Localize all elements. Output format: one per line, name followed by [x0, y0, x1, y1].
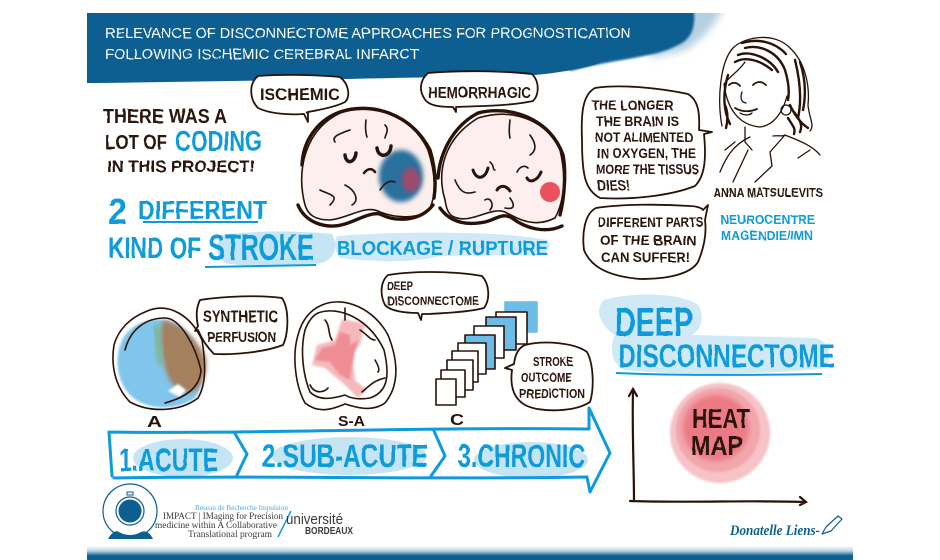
title text: RELEVANCE OF DISCONNECTOME APPROACHES FOR PROGNOSTICATION	[105, 25, 631, 42]
timeline arrow	[109, 408, 610, 492]
affiliation: MAGENDIE/IMN	[721, 228, 813, 243]
heading: 2 different kind of stroke: BLOCKAGE / RUPTURE	[337, 238, 548, 260]
bubble: different parts: OF THE BRAIN	[600, 232, 696, 248]
heading: coding in this project: IN THIS PROJECT!	[107, 157, 255, 176]
label: C: C	[450, 412, 465, 429]
bubble: the longer the brain: THE LONGER	[592, 97, 673, 113]
brain: hemorrhagic	[438, 111, 565, 230]
heading: 2 different kind of stroke: KIND OF	[108, 232, 201, 265]
heading: coding in this project: THERE WAS A	[103, 106, 227, 128]
heading: 2 different kind of stroke: STROKE	[208, 227, 314, 268]
heading: coding in this project: CODING	[175, 126, 262, 158]
heat map text: MAP	[691, 430, 743, 461]
heading: 2 different kind of stroke: DIFFERENT	[138, 195, 267, 225]
highlights	[133, 437, 588, 478]
bubble: the longer the brain: MORE THE TISSUS	[596, 161, 699, 177]
bubble: deep disconnectome: DISCONNECTOME	[387, 294, 479, 308]
footer band	[87, 546, 853, 560]
bubble: deep disconnectome	[382, 272, 488, 320]
brain face	[473, 168, 541, 181]
bubble: hemorrhagic: HEMORRHAGIC	[428, 85, 531, 102]
affiliation	[720, 212, 815, 243]
heat map chart	[629, 383, 806, 505]
bubble: different parts: CAN SUFFER!	[601, 249, 690, 265]
title text	[105, 25, 631, 63]
bubble: the longer the brain: NOT ALIMENTED	[595, 129, 693, 145]
logo text: impact: medicine within A Collaborative	[155, 520, 277, 530]
logo text: impact	[155, 504, 289, 539]
bubble: stroke outcome prediction: PREDICTION	[519, 386, 585, 401]
bubble: synthetic perfusion	[195, 296, 287, 354]
image stack	[436, 302, 537, 429]
bubble: stroke outcome prediction	[505, 343, 593, 410]
signature	[729, 516, 842, 539]
stages: 2.SUB-ACUTE	[262, 438, 428, 474]
heading: deep disconnectome	[599, 295, 835, 375]
logo: université de bordeaux	[278, 511, 353, 537]
highlight: stroke	[217, 232, 335, 266]
affiliation: NEUROCENTRE	[720, 212, 815, 227]
lesion: rupture	[540, 182, 560, 202]
bubble: the longer the brain: DIES!	[597, 177, 630, 193]
bubble: synthetic perfusion: PERFUSION	[207, 329, 276, 346]
heading: 2 different kind of stroke	[108, 191, 549, 268]
bubble: different parts	[583, 205, 708, 279]
portrait: Anna Matsulevits	[720, 37, 820, 182]
bubble: deep disconnectome: DEEP	[387, 279, 413, 293]
name: Anna Matsulevits: ANNA MATSULEVITS	[713, 185, 823, 200]
bubble: the longer the brain: THE BRAIN IS	[596, 113, 679, 129]
bubble: the longer the brain	[582, 86, 712, 198]
bubble: different parts: DIFFERENT PARTS	[598, 214, 704, 230]
label: A: A	[147, 414, 163, 431]
signature: Donatelle Liens-	[729, 523, 820, 539]
lesion: blockage	[379, 150, 423, 202]
logo text: impact: Translational program	[188, 529, 272, 539]
brain scan: sub-acute	[295, 302, 396, 430]
heading: coding in this project: LOT OF	[105, 132, 167, 154]
bubble: stroke outcome prediction: STROKE	[533, 354, 573, 369]
heat blob	[670, 383, 770, 483]
heading: 2 different kind of stroke: 2	[108, 191, 127, 232]
brain: ischemic	[298, 108, 435, 226]
logo: université de bordeaux: BORDEAUX	[305, 526, 353, 537]
bubble: hemorrhagic	[421, 71, 538, 112]
logo text: impact: IMPACT | IMaging for Precision	[163, 511, 283, 521]
brain face	[345, 146, 391, 162]
highlight	[599, 295, 829, 374]
logo: université de bordeaux: université	[286, 511, 343, 528]
heading: coding in this project	[103, 106, 262, 176]
highlight: blockage rupture	[335, 233, 549, 261]
heat map text	[691, 403, 750, 461]
heading: deep disconnectome: DISCONNECTOME	[618, 338, 835, 374]
title text: FOLLOWING ISCHEMIC CEREBRAL INFARCT	[105, 46, 419, 63]
stages	[119, 438, 585, 478]
brain scan: acute	[113, 308, 206, 431]
heading: deep disconnectome: DEEP	[615, 299, 693, 345]
axes	[629, 389, 806, 505]
logo: impact scanner	[103, 484, 157, 539]
banner fade	[568, 13, 726, 72]
logo text: impact: Réseau de Recherche Impulsion	[195, 504, 289, 512]
label: S-A: S-A	[338, 413, 365, 430]
bubble: stroke outcome prediction: OUTCOME	[521, 370, 572, 385]
stages: 3.CHRONIC	[458, 438, 585, 474]
bubble: ischemic: ISCHEMIC	[260, 85, 340, 104]
bubble: the longer the brain: IN OXYGEN, THE	[597, 145, 696, 161]
icon: pencil	[822, 516, 842, 534]
stages: 1.ACUTE	[119, 442, 218, 478]
bubble: synthetic perfusion: SYNTHETIC	[203, 307, 278, 326]
heat map text: HEAT	[692, 403, 750, 434]
bubble: ischemic	[251, 75, 348, 122]
title banner	[87, 13, 726, 83]
